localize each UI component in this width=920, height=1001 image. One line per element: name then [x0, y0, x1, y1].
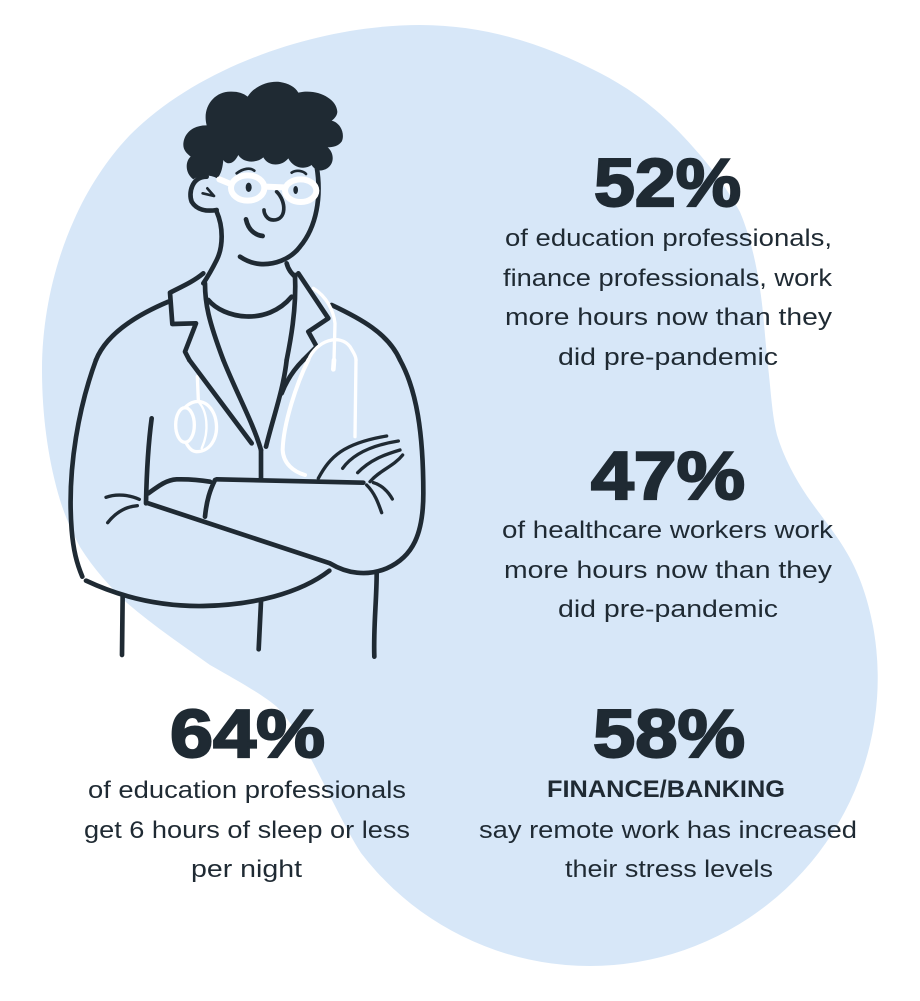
description 47%: [502, 517, 834, 623]
eyes: [246, 183, 298, 194]
coat lines: [71, 360, 423, 657]
description 52%: finance professionals, work: [503, 265, 833, 292]
description 64%: per night: [191, 856, 302, 883]
head and upper body: [96, 82, 400, 360]
stat: 58%: [479, 696, 857, 883]
number 52%: 52%: [594, 145, 741, 221]
stethoscope lower: [176, 360, 356, 475]
face lines: [190, 167, 319, 283]
stat: 64%: [84, 696, 410, 883]
description 47%: more hours now than they: [504, 557, 832, 584]
description 58%: their stress levels: [565, 856, 773, 883]
coat collar and shoulders: [96, 273, 400, 360]
arms and lower body: [71, 360, 423, 657]
description 52%: more hours now than they: [505, 304, 832, 331]
description 58%: FINANCE/BANKING: [547, 776, 785, 803]
description 64%: get 6 hours of sleep or less: [84, 817, 410, 844]
description 58%: [479, 776, 857, 883]
stat: 47%: [502, 438, 834, 623]
description 52%: [503, 225, 833, 371]
number 64%: 64%: [170, 696, 325, 772]
hair: [183, 82, 343, 179]
description 64%: of education professionals: [88, 777, 406, 804]
number 47%: 47%: [591, 438, 745, 514]
stat: 52%: [503, 145, 833, 371]
glasses: [219, 175, 316, 202]
crossed hand: [106, 436, 403, 523]
description 47%: did pre-pandemic: [558, 596, 778, 623]
doctor illustration: [71, 82, 423, 657]
stethoscope top: [308, 288, 356, 360]
description 52%: did pre-pandemic: [558, 344, 778, 371]
description 58%: say remote work has increased: [479, 817, 857, 844]
number 58%: 58%: [593, 696, 745, 772]
description 52%: of education professionals,: [505, 225, 832, 252]
description 47%: of healthcare workers work: [502, 517, 834, 544]
description 64%: [84, 777, 410, 883]
